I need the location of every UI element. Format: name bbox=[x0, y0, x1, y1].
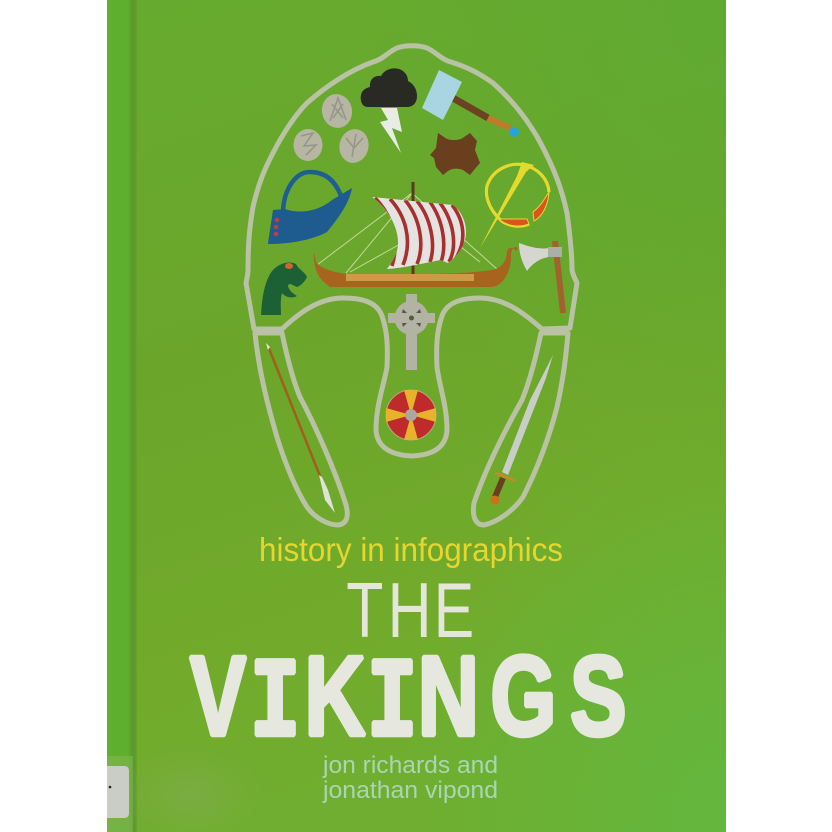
icon: animal hide bbox=[430, 133, 480, 175]
icon: spear bbox=[266, 343, 335, 513]
book cover background bbox=[107, 0, 726, 832]
library label on spine bbox=[107, 756, 133, 832]
icon: dragon head prow bbox=[261, 262, 307, 315]
oar band bbox=[346, 274, 474, 281]
icon: Thor's hammer bbox=[422, 70, 519, 137]
title: VIKINGS: N bbox=[418, 634, 479, 760]
title: VIKINGS: I bbox=[367, 641, 418, 769]
rigging bbox=[317, 192, 498, 273]
title: THE: T bbox=[346, 567, 383, 654]
mast bbox=[412, 182, 414, 274]
icon: Celtic cross bbox=[388, 294, 435, 370]
title: THE: H bbox=[388, 567, 432, 654]
icon: drinking horn bbox=[268, 172, 352, 244]
title: VIKINGS: G bbox=[491, 634, 556, 760]
author line 2: jonathan vipond bbox=[322, 777, 498, 804]
icon: ring brooch bbox=[480, 162, 549, 248]
left cheek guard bbox=[255, 333, 347, 525]
icon: sword bbox=[490, 355, 553, 504]
icon: longship bbox=[314, 182, 518, 287]
icon: round shield bbox=[386, 390, 436, 440]
helmet dome and nose guard bbox=[246, 46, 577, 456]
title: VIKINGS: V bbox=[190, 634, 246, 760]
subtitle: series name: history in infographics bbox=[259, 531, 563, 568]
icon: lightning bolt bbox=[380, 108, 402, 153]
icon: battle axe bbox=[519, 241, 566, 313]
title: VIKINGS: S bbox=[570, 634, 627, 760]
hull bbox=[314, 247, 518, 287]
icon: storm cloud bbox=[361, 68, 417, 107]
title: VIKINGS: K bbox=[305, 634, 366, 760]
striped sail bbox=[372, 197, 466, 269]
icon: rune stones bbox=[294, 91, 372, 166]
author line 1: jon richards and bbox=[322, 752, 498, 779]
helmet outline bbox=[246, 46, 577, 525]
title: VIKINGS: I bbox=[250, 641, 301, 769]
title: THE: E bbox=[434, 567, 474, 654]
right cheek guard bbox=[473, 333, 568, 525]
